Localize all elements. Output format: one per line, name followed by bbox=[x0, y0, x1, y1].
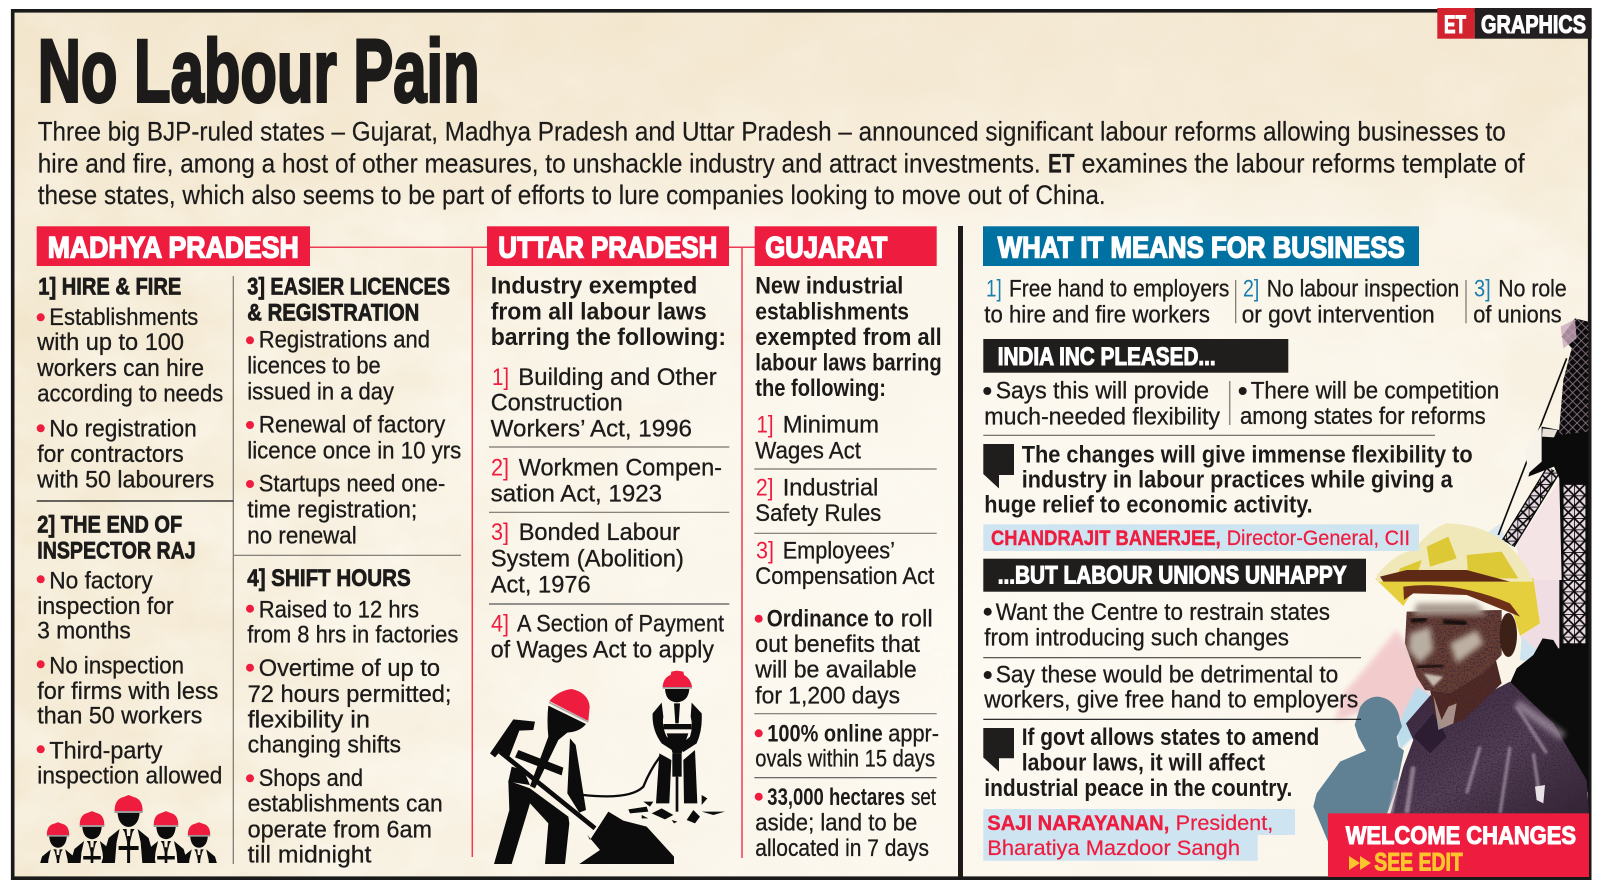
quote: Saji Narayanan: labour laws, it will affect bbox=[1022, 750, 1265, 777]
section 2: the end of inspector raj: 3 months bbox=[37, 617, 131, 644]
lead text bbox=[491, 273, 726, 351]
quote: Saji Narayanan: industrial peace in the country. bbox=[984, 775, 1292, 802]
benefits: appr- bbox=[888, 720, 939, 747]
watercolor wash bbox=[1334, 630, 1430, 722]
ET Graphics badge: ET bbox=[1444, 11, 1466, 39]
section 1: hire and fire: Establishments bbox=[49, 304, 198, 331]
section 4: shift hours: operate from 6am bbox=[248, 816, 432, 843]
heading: Madhya Pradesh: MADHYA PRADESH bbox=[48, 231, 299, 264]
three key points: No labour inspection bbox=[1267, 275, 1459, 302]
benefits: allocated in 7 days bbox=[755, 835, 929, 862]
list of laws: System (Abolition) bbox=[491, 546, 684, 573]
panel: Gujarat bbox=[754, 226, 942, 862]
three key points: to hire and fire workers bbox=[984, 301, 1210, 328]
section 3: easier licences and registration: licences to be bbox=[247, 353, 381, 380]
section 2: the end of inspector raj: for firms with less bbox=[37, 678, 218, 705]
list of laws: Safety Rules bbox=[755, 500, 881, 527]
benefits: will be available bbox=[754, 656, 917, 683]
list of laws bbox=[754, 412, 937, 590]
India Inc reactions bbox=[983, 377, 1499, 435]
quote: Chandrajit Banerjee: Director-General, CII bbox=[1227, 526, 1410, 550]
list of laws: A Section of Payment bbox=[517, 611, 724, 638]
section 3: easier licences and registration: Startups need one- bbox=[259, 471, 445, 498]
list of laws: sation Act, 1923 bbox=[491, 481, 662, 508]
subheading: India Inc pleased: INDIA INC PLEASED... bbox=[998, 343, 1216, 371]
shirt highlights bbox=[1391, 703, 1563, 813]
section 3: easier licences and registration: time registration; bbox=[247, 496, 417, 523]
intro text: ET bbox=[1048, 148, 1074, 178]
red connector lines between state headings bbox=[310, 247, 755, 858]
three key points: No role bbox=[1498, 275, 1567, 302]
crane and tower upper bbox=[1487, 318, 1588, 581]
list of laws: Minimum bbox=[783, 412, 879, 439]
benefits: 33,000 hectares bbox=[767, 784, 905, 811]
three key points: or govt intervention bbox=[1242, 301, 1435, 328]
section 2: the end of inspector raj: 2] THE END OF bbox=[37, 512, 182, 539]
benefits: for 1,200 days bbox=[755, 682, 900, 709]
list of laws: Act, 1976 bbox=[491, 571, 591, 598]
worker photo collage bbox=[1313, 318, 1589, 881]
section 2: the end of inspector raj: than 50 workers bbox=[37, 702, 202, 729]
section 3: easier licences and registration: licence once in 10 yrs bbox=[247, 437, 461, 464]
lead text: labour laws barring bbox=[755, 350, 942, 377]
list of laws: Construction bbox=[491, 390, 623, 417]
lead text: the following: bbox=[755, 375, 886, 402]
neck bbox=[1430, 657, 1502, 728]
benefits: aside; land to be bbox=[755, 810, 917, 837]
panel: Madhya Pradesh bbox=[36, 226, 461, 879]
quote: Saji Narayanan: President, bbox=[1176, 811, 1273, 835]
helmet brim bbox=[1375, 578, 1540, 636]
section 1: hire and fire: with up to 100 bbox=[36, 329, 184, 356]
section 4: shift hours: changing shifts bbox=[248, 731, 401, 758]
section 2: the end of inspector raj: inspection for bbox=[37, 593, 174, 620]
section 2: the end of inspector raj bbox=[37, 512, 222, 789]
list of laws: Bonded Labour bbox=[519, 519, 680, 546]
lead text: exempted from all bbox=[755, 324, 942, 351]
icon: speech bubble bbox=[983, 728, 1014, 772]
list of laws: Wages Act bbox=[755, 437, 861, 464]
section 1: hire and fire: workers can hire bbox=[36, 355, 204, 382]
India Inc reactions: There will be competition bbox=[1251, 377, 1499, 404]
benefits: ovals within 15 days bbox=[755, 746, 935, 773]
quote: Chandrajit Banerjee: industry in labour practices while giving a bbox=[1022, 467, 1453, 494]
intro text: these states, which also seems to be part of efforts to lure companies looking to move out of China. bbox=[38, 180, 1106, 210]
section 2: the end of inspector raj: No inspection bbox=[49, 652, 184, 679]
section 1: hire and fire: No registration bbox=[49, 416, 197, 443]
section 3: easier licences and registration: Renewal of factory bbox=[259, 411, 445, 438]
section 2: the end of inspector raj: INSPECTOR RAJ bbox=[37, 537, 196, 564]
section 3: easier licences and registration: no renewal bbox=[247, 522, 357, 549]
quote: Saji Narayanan: SAJI NARAYANAN, bbox=[987, 811, 1169, 835]
section 4: shift hours: Shops and bbox=[259, 765, 363, 792]
three key points bbox=[984, 275, 1567, 328]
blue wash bbox=[1397, 687, 1433, 750]
ET Graphics badge bbox=[1437, 8, 1592, 39]
quote: Chandrajit Banerjee bbox=[983, 442, 1473, 551]
section 4: shift hours: till midnight bbox=[248, 842, 372, 869]
callout: welcome changes, see edit: SEE EDIT bbox=[1374, 849, 1463, 877]
intro text: Three big BJP-ruled states – Gujarat, Madhya Pradesh and Uttar Pradesh – announced significant labour reforms allowing businesses to bbox=[38, 116, 1506, 146]
quote: Chandrajit Banerjee: The changes will give immense flexibility to bbox=[1022, 442, 1473, 469]
section 1: hire and fire: 1] HIRE & FIRE bbox=[38, 273, 181, 300]
benefits: roll bbox=[901, 606, 933, 633]
shirt bbox=[1390, 682, 1589, 815]
heading: Gujarat bbox=[755, 226, 937, 266]
section 3: easier licences and registration: 3] EASIER LICENCES bbox=[247, 273, 450, 300]
benefits: 100% online bbox=[767, 720, 883, 747]
refinery silhouette bbox=[1510, 638, 1588, 793]
callout: welcome changes, see edit bbox=[1346, 822, 1576, 877]
section 3: easier licences and registration bbox=[246, 273, 461, 549]
title: No Labour Pain bbox=[38, 21, 480, 121]
India Inc reactions: among states for reforms bbox=[1240, 403, 1486, 430]
union reactions: workers, give free hand to employers bbox=[983, 687, 1358, 714]
quote: Chandrajit Banerjee: huge relief to economic activity. bbox=[984, 492, 1313, 519]
pale sky behind helmet bbox=[1520, 580, 1560, 650]
section 1: hire and fire bbox=[36, 273, 223, 493]
lead text: establishments bbox=[755, 298, 909, 325]
list of laws: 3] bbox=[491, 519, 509, 546]
list of laws: 2] bbox=[491, 455, 509, 482]
face dirt patches bbox=[1408, 603, 1517, 687]
three key points: 2] bbox=[1243, 275, 1259, 302]
section 4: shift hours: 72 hours permitted; bbox=[248, 681, 452, 708]
section 1: hire and fire: with 50 labourers bbox=[36, 466, 214, 493]
three key points: of unions bbox=[1473, 301, 1562, 328]
benefits bbox=[754, 606, 939, 862]
list of laws: 3] bbox=[756, 537, 774, 564]
list of laws: Workers’ Act, 1996 bbox=[491, 416, 692, 443]
grey silhouette of a worker bbox=[1313, 697, 1404, 842]
benefits: set bbox=[911, 784, 936, 811]
section 2: the end of inspector raj: No factory bbox=[49, 567, 153, 594]
section 3: easier licences and registration: issued in a day bbox=[247, 378, 394, 405]
three key points: 3] bbox=[1474, 275, 1491, 302]
India Inc reactions: much-needed flexibility bbox=[984, 403, 1220, 430]
India Inc reactions: Says this will provide bbox=[996, 377, 1209, 404]
section 4: shift hours: 4] SHIFT HOURS bbox=[247, 565, 411, 592]
benefits: out benefits that bbox=[755, 631, 920, 658]
column dividers bbox=[233, 276, 461, 864]
heading: Gujarat: GUJARAT bbox=[765, 231, 887, 264]
panel: What it means for business bbox=[983, 226, 1567, 861]
list of laws: Employees’ bbox=[783, 537, 895, 564]
section 3: easier licences and registration: & REGISTRATION bbox=[247, 299, 419, 326]
quote: Saji Narayanan: Bharatiya Mazdoor Sangh bbox=[987, 836, 1240, 860]
list of laws: Compensation Act bbox=[755, 563, 935, 590]
three key points: Free hand to employers bbox=[1009, 275, 1229, 302]
list of laws: 1] bbox=[756, 412, 774, 439]
list of laws: 2] bbox=[756, 475, 774, 502]
lead text bbox=[755, 273, 942, 402]
lead text: from all labour laws bbox=[491, 299, 707, 326]
intro text: hire and fire, among a host of other measures, to unshackle industry and attract investments. bbox=[38, 148, 1041, 178]
heading: what it means for business: WHAT IT MEANS FOR BUSINESS bbox=[998, 231, 1405, 264]
section 2: the end of inspector raj: inspection allowed bbox=[37, 762, 222, 789]
lead text: New industrial bbox=[755, 273, 903, 300]
list of laws: 4] bbox=[491, 611, 509, 638]
subheading: labour unions unhappy: ...BUT LABOUR UNIONS UNHAPPY bbox=[998, 561, 1347, 589]
list of laws: 1] bbox=[492, 364, 509, 391]
red welcome box bbox=[1328, 813, 1589, 881]
section 4: shift hours: flexibility in bbox=[248, 706, 370, 733]
list of laws: of Wages Act to apply bbox=[491, 636, 714, 663]
section 1: hire and fire: according to needs bbox=[37, 381, 223, 408]
section 4: shift hours bbox=[246, 565, 458, 869]
quote: Saji Narayanan: If govt allows states to amend bbox=[1022, 724, 1319, 751]
union reactions: Say these would be detrimental to bbox=[996, 662, 1338, 689]
list of laws: Building and Other bbox=[518, 364, 717, 391]
list of laws bbox=[489, 364, 729, 663]
intro text bbox=[38, 116, 1525, 210]
section 4: shift hours: establishments can bbox=[248, 790, 443, 817]
thick column divider bbox=[958, 226, 963, 877]
lower tower bbox=[1559, 580, 1588, 652]
heading: Uttar Pradesh: UTTAR PRADESH bbox=[498, 231, 717, 264]
section 4: shift hours: Raised to 12 hrs bbox=[259, 596, 419, 623]
section 4: shift hours: from 8 hrs in factories bbox=[247, 622, 458, 649]
union reactions bbox=[983, 599, 1361, 719]
section 3: easier licences and registration: Registrations and bbox=[259, 327, 430, 354]
quote: Chandrajit Banerjee: CHANDRAJIT BANERJEE, bbox=[991, 526, 1221, 550]
intro text: examines the labour reforms template of bbox=[1082, 148, 1525, 178]
section 4: shift hours: Overtime of up to bbox=[259, 655, 440, 682]
the worker: shirt, neck, face bbox=[1390, 610, 1589, 815]
benefits: Ordinance to bbox=[767, 606, 894, 633]
union reactions: Want the Centre to restrain states bbox=[996, 599, 1330, 626]
icon: construction workers with shovel and jackhammer bbox=[490, 671, 725, 864]
list of laws: Industrial bbox=[783, 475, 878, 502]
three key points: 1] bbox=[986, 275, 1002, 302]
union reactions: from introducing such changes bbox=[984, 625, 1289, 652]
icon: double arrow bbox=[1349, 856, 1371, 870]
icon: five workers bbox=[40, 795, 217, 863]
lead text: Industry exempted bbox=[491, 273, 697, 300]
lead text: barring the following: bbox=[491, 324, 726, 351]
section 2: the end of inspector raj: Third-party bbox=[49, 737, 162, 764]
list of laws: Workmen Compen- bbox=[519, 455, 722, 482]
icon: speech bubble bbox=[983, 444, 1014, 488]
panel: Uttar Pradesh bbox=[487, 226, 729, 864]
face bbox=[1405, 610, 1502, 693]
helmet dome bbox=[1377, 523, 1533, 582]
quote: Saji Narayanan bbox=[983, 724, 1319, 861]
section 1: hire and fire: for contractors bbox=[37, 441, 184, 468]
